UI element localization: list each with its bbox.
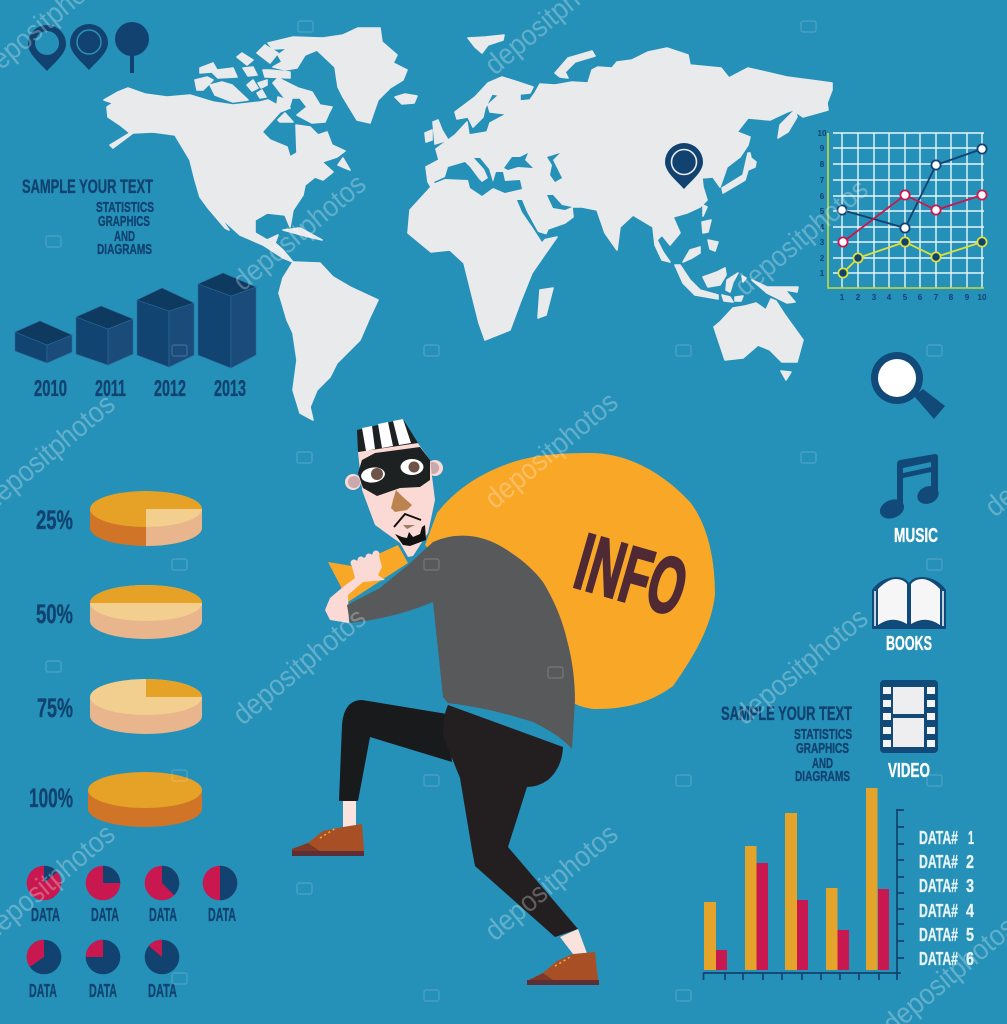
75% disc — [37, 679, 202, 734]
ears — [345, 460, 443, 490]
75% disc: 75% — [37, 693, 73, 723]
pin with stem — [115, 22, 149, 73]
axis numbers: 8 — [949, 293, 954, 302]
axis numbers: 1 — [840, 293, 845, 302]
axis numbers: 6 — [820, 192, 825, 201]
watermarks: depositphotos — [227, 168, 372, 297]
axes — [703, 809, 904, 980]
text block: top left: DIAGRAMS — [97, 241, 152, 258]
text block: lower right: AND — [812, 755, 833, 772]
forearm and hand — [325, 550, 385, 623]
text block: top left: GRAPHICS — [98, 213, 150, 230]
data legend: 5 — [966, 925, 974, 945]
text block: top left: AND — [114, 228, 135, 245]
pie 6 — [86, 940, 120, 1001]
label: VIDEO — [888, 760, 930, 782]
25% disc: 25% — [36, 505, 73, 535]
icon: magnifying glass — [871, 352, 945, 419]
data legend: DATA# — [919, 949, 958, 969]
25% disc — [36, 491, 202, 546]
axis numbers: 2 — [856, 293, 861, 302]
axis numbers: 1 — [820, 269, 825, 278]
Islands of Eurasia and Oceania — [425, 35, 798, 318]
data legend: 4 — [966, 901, 974, 921]
3D bar chart 2010-2013 — [15, 273, 256, 401]
pink series — [838, 190, 987, 247]
icon: books — [872, 577, 946, 655]
label: BOOKS — [886, 633, 932, 655]
watermarks: depositphotos — [729, 602, 874, 731]
right ankle — [560, 929, 588, 956]
pin with hole — [28, 25, 66, 71]
pie 4: DATA — [208, 905, 236, 925]
percentage disc charts — [29, 491, 202, 827]
music note — [877, 454, 941, 522]
pie 3 — [145, 866, 179, 925]
Eurasia and Africa — [408, 48, 832, 340]
axis numbers: 10 — [978, 293, 987, 302]
yellow series — [838, 237, 987, 278]
pie 5: DATA — [29, 981, 57, 1001]
pie 3: DATA — [149, 905, 177, 925]
pie 2: DATA — [91, 905, 119, 925]
data legend: 2 — [966, 852, 974, 872]
nose — [391, 490, 412, 512]
left shoe — [292, 824, 364, 856]
left ankle — [343, 801, 356, 828]
sack label: INFO — [566, 517, 697, 633]
right shoe — [527, 952, 599, 985]
grid — [833, 133, 984, 288]
year labels: 2013 — [214, 375, 246, 401]
axis numbers: 3 — [820, 238, 825, 247]
Greenland — [268, 28, 407, 123]
50% disc — [36, 585, 202, 639]
pie 2 — [86, 866, 120, 925]
year labels: 2010 — [34, 375, 67, 401]
inland seas — [434, 153, 572, 242]
pie 6: DATA — [89, 981, 117, 1001]
axis numbers: 6 — [918, 293, 923, 302]
data legend: DATA# — [919, 828, 958, 848]
South America — [279, 262, 378, 420]
small pie charts — [27, 866, 237, 1001]
axis numbers: 9 — [965, 293, 970, 302]
axis numbers: 8 — [820, 160, 825, 169]
50% disc: 50% — [36, 599, 73, 629]
axis numbers: 2 — [820, 254, 825, 263]
location pins top left — [28, 22, 149, 73]
bar 2010 — [15, 321, 72, 363]
data legend: DATA# — [919, 925, 958, 945]
pie 7: DATA — [148, 981, 177, 1001]
icon: music — [877, 454, 941, 547]
sack tail — [328, 545, 408, 602]
axis numbers: 9 — [820, 144, 825, 153]
map pin on China — [665, 143, 703, 189]
watermarks: depositphotos — [729, 173, 874, 302]
bar 2013 — [198, 273, 256, 368]
axis numbers: 4 — [887, 293, 892, 302]
axis numbers: 5 — [820, 207, 825, 216]
sack — [425, 453, 715, 709]
year labels: 2011 — [95, 375, 126, 401]
axes — [828, 133, 984, 288]
face — [358, 442, 435, 557]
back leg — [339, 700, 452, 801]
line chart — [818, 129, 987, 302]
data legend: DATA# — [919, 876, 958, 896]
text block: lower right: DIAGRAMS — [795, 768, 850, 785]
bar chart lower right — [703, 788, 974, 980]
year labels: 2012 — [154, 375, 186, 401]
data legend: 3 — [966, 876, 974, 896]
pie 4 — [203, 866, 237, 925]
thief character — [292, 419, 715, 985]
axis numbers: 3 — [872, 293, 877, 302]
icon: video — [880, 680, 938, 782]
watermarks: depositphotos — [479, 386, 624, 515]
axis numbers: 10 — [818, 129, 827, 138]
pie 1 — [27, 866, 61, 925]
Canadian arctic islands — [195, 45, 350, 240]
text block: top left — [22, 177, 154, 258]
watermarks: depositphotos — [227, 602, 372, 731]
navy series — [837, 144, 987, 233]
North America — [104, 88, 345, 262]
text block: lower right: GRAPHICS — [796, 740, 849, 757]
mask — [358, 447, 430, 496]
prison cap — [357, 419, 418, 452]
text block: lower right — [721, 704, 852, 785]
pie 1: DATA — [31, 905, 60, 925]
100% disc — [29, 772, 202, 827]
year labels — [34, 375, 246, 401]
text block: top left: SAMPLE YOUR TEXT — [22, 177, 153, 198]
data legend: DATA# — [919, 901, 958, 921]
beard and mouth — [394, 514, 426, 546]
bar 2012 — [137, 288, 194, 367]
data legend: 6 — [966, 949, 974, 969]
Australia and Tasmania — [714, 299, 803, 380]
yellow bars — [704, 788, 878, 970]
text block: lower right: SAMPLE YOUR TEXT — [721, 704, 852, 725]
pie 5 — [27, 940, 61, 1001]
bar 2011 — [76, 306, 133, 365]
100% disc: 100% — [29, 783, 73, 813]
film strip — [880, 680, 938, 753]
text block: lower right: STATISTICS — [794, 726, 852, 743]
pie 7 — [145, 940, 179, 1001]
data legend: DATA# — [919, 852, 958, 872]
axis numbers — [818, 129, 987, 302]
data legend: 1 — [968, 828, 974, 848]
pin with ring — [70, 24, 108, 70]
label: MUSIC — [894, 525, 938, 547]
axis numbers: 5 — [903, 293, 908, 302]
text block: top left: STATISTICS — [96, 199, 154, 216]
world map — [104, 28, 832, 420]
data legend — [919, 828, 974, 969]
pink bars — [716, 863, 889, 970]
front leg — [443, 705, 578, 937]
axis numbers: 7 — [934, 293, 939, 302]
sweater — [347, 536, 575, 749]
open book — [872, 577, 946, 629]
axis numbers: 7 — [820, 176, 825, 185]
watermarks: depositphotos — [479, 818, 624, 947]
Iceland — [395, 94, 417, 104]
axis numbers: 4 — [820, 223, 825, 232]
